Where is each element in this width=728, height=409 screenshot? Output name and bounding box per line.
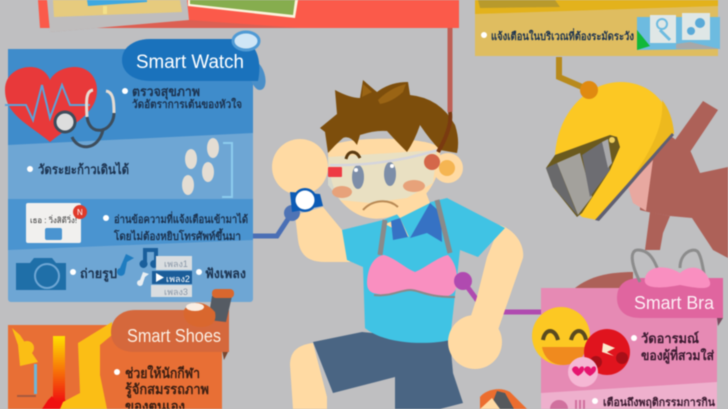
icon: heart with stethoscope <box>5 67 114 147</box>
icon: happy emoji <box>532 307 590 365</box>
text: measure mood: ของผู้ที่สวมใส่ <box>641 346 714 364</box>
panel: smart bra <box>532 250 723 409</box>
icon: orange shoe <box>184 289 234 327</box>
glasses earpiece <box>424 154 440 170</box>
text: listen to music: ฟังเพลง <box>205 266 246 281</box>
playlist: เพลง1 <box>164 259 188 269</box>
collar <box>391 203 442 242</box>
blush <box>332 180 425 198</box>
icon: footprints <box>182 138 232 197</box>
connector dot: bra <box>454 272 472 290</box>
heading: Smart Shoes <box>111 310 229 360</box>
right foot <box>480 389 527 409</box>
text: eating behaviour: เตือนถึงพฤติกรรมการกิน <box>603 396 715 409</box>
connector: glasses to panel <box>448 28 452 112</box>
icon: message card <box>26 203 87 243</box>
connector: watch <box>253 213 292 236</box>
icon: red emotion ball <box>584 329 630 375</box>
text: measure mood <box>631 331 714 364</box>
playlist: เพลง3 <box>164 287 188 297</box>
text: helmet alert: แจ้งเตือนในบริเวณที่ต้องระมัดระวัง <box>491 28 634 43</box>
icon: jumping athlete <box>12 328 38 397</box>
shorts <box>313 332 463 409</box>
text: health check: วัดอัตราการเต้นของหัวใจ <box>132 97 242 111</box>
text: athlete performance: ช่วยให้นักกีฬา <box>125 364 200 381</box>
eyes <box>352 162 396 189</box>
heading: Smart Bra: Smart Bra <box>634 293 715 313</box>
panel: smart glasses (top, cropped) <box>38 0 459 32</box>
connector: helmet <box>559 57 589 90</box>
panel: smart shoes <box>8 289 234 409</box>
panel: smart helmet (top, cropped) <box>475 0 720 56</box>
icon: music notes <box>117 248 158 286</box>
icon: eating <box>550 400 585 409</box>
eyebrow <box>346 152 360 159</box>
panel: smart watch <box>5 32 266 302</box>
playlist <box>151 256 192 297</box>
shirt <box>342 198 505 343</box>
illustration: yellow helmet <box>546 82 674 221</box>
hair <box>320 80 458 153</box>
gauge bar <box>42 336 66 409</box>
text: athlete performance: รู้จักสมรรถภาพ <box>125 381 209 398</box>
illustration: runner character <box>272 80 527 409</box>
glasses frame <box>330 150 438 165</box>
glasses lens <box>328 150 437 203</box>
bra <box>367 255 457 297</box>
text: read notifications: โดยไม่ต้องหยิบโทรศัพท์ขึ้นมา <box>113 228 241 243</box>
connector dot: watch <box>284 205 300 221</box>
text: health check: ตรวจสุขภาพ <box>132 84 200 100</box>
fist <box>448 315 502 369</box>
connector: bra <box>463 281 541 312</box>
text: read notifications <box>103 211 248 243</box>
icon: alert signs <box>637 13 720 50</box>
icon: bra <box>632 250 710 288</box>
icon: message card: เธอ : วิ่งสิดีวิ่ง! <box>30 214 77 225</box>
text: step distance: วัดระยะก้าวเดินได้ <box>38 161 129 177</box>
heading: Smart Shoes: Smart Shoes <box>127 326 221 346</box>
raised arm <box>295 207 350 262</box>
raised hand <box>272 139 328 195</box>
bra straps <box>380 200 450 255</box>
playlist: เพลง2 <box>166 274 190 284</box>
heading: Smart Watch: Smart Watch <box>136 52 244 73</box>
text: measure mood: วัดอารมณ์ <box>641 331 699 346</box>
connector dot: helmet <box>580 81 598 99</box>
mouth <box>363 201 398 210</box>
glasses wire <box>438 112 450 152</box>
head <box>328 139 440 219</box>
illustration: yellow leg <box>60 322 112 409</box>
left leg <box>290 343 327 409</box>
neck <box>385 190 430 237</box>
right arm <box>468 225 523 333</box>
watch <box>290 188 323 212</box>
heading: Smart Bra <box>617 278 723 326</box>
text: take photo: ถ่ายรูป <box>80 266 117 282</box>
illustration: brown figure wearing helmet <box>575 101 728 290</box>
heading: Smart Watch <box>122 32 266 90</box>
glasses camera <box>328 167 342 177</box>
text: read notifications: อ่านข้อความที่แจ้งเตือนเข้ามาได้ <box>114 211 248 226</box>
icon: love emoji <box>568 357 598 387</box>
icon: message card: N <box>77 208 83 217</box>
ear <box>433 153 463 183</box>
text: athlete performance <box>114 364 209 409</box>
icon: camera <box>16 258 66 290</box>
text: health check <box>122 84 242 111</box>
